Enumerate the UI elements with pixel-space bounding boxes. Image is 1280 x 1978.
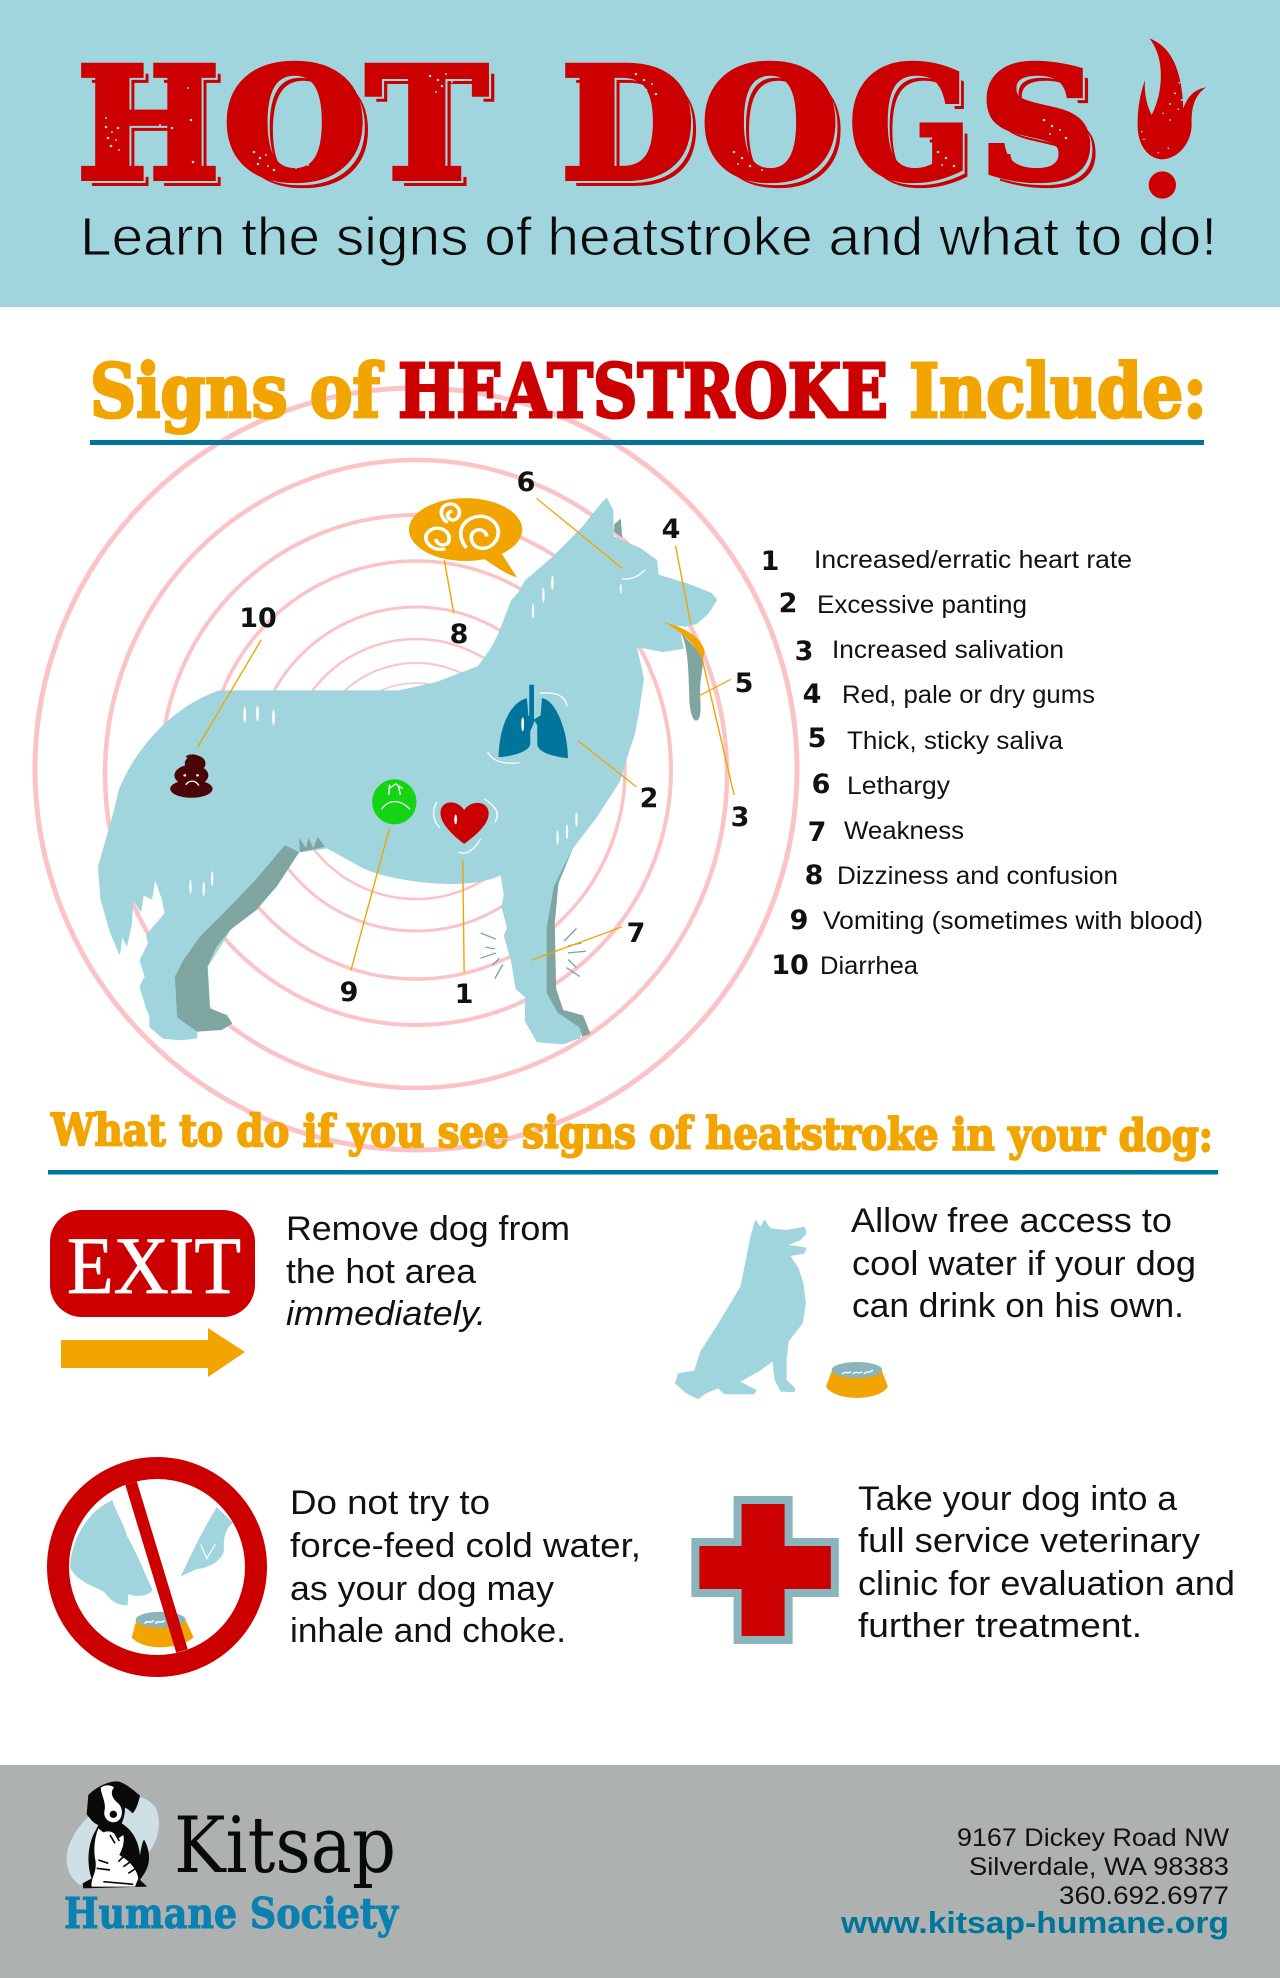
diagram numbers: 9 — [340, 977, 358, 1008]
icon: nausea face — [372, 779, 416, 824]
step text: cool water if your dog — [852, 1245, 1196, 1283]
list of signs: Thick, sticky saliva — [847, 727, 1063, 755]
heading: signs of heatstroke — [90, 349, 1207, 435]
belly tuft — [299, 837, 325, 852]
step text — [851, 1202, 1196, 1325]
title: G — [848, 34, 971, 215]
step: no force-feeding — [58, 1468, 641, 1666]
step text: can drink on his own. — [852, 1287, 1184, 1325]
dog body — [98, 498, 717, 1044]
step text — [858, 1480, 1235, 1645]
front leg shadow — [547, 848, 591, 1037]
diagram numbers: 7 — [627, 918, 645, 949]
list of signs: Weakness — [844, 817, 964, 845]
icon: heart — [434, 799, 497, 853]
icon: diarrhea — [170, 754, 213, 798]
diagram numbers: 2 — [640, 783, 658, 814]
list of signs: Lethargy — [847, 772, 951, 800]
weakness ticks — [481, 928, 586, 979]
icon: medical cross — [695, 1500, 835, 1640]
icon: flame exclamation mark — [1138, 38, 1206, 199]
step text: the hot area — [286, 1253, 476, 1291]
saliva — [680, 632, 703, 721]
step text: force-feed cold water, — [290, 1527, 641, 1565]
diagram numbers: 8 — [450, 619, 468, 650]
step text: Allow free access to — [851, 1202, 1172, 1240]
tongue — [663, 622, 705, 660]
icon: lungs — [488, 685, 568, 763]
title — [76, 34, 1096, 215]
step text: clinic for evaluation and — [858, 1565, 1235, 1603]
list of signs: 8 — [805, 860, 823, 891]
arrow — [61, 1328, 245, 1377]
icon: dog and cat logo — [67, 1781, 159, 1888]
fur highlights — [189, 575, 622, 896]
list of signs: Increased/erratic heart rate — [814, 546, 1132, 574]
step text — [290, 1484, 641, 1650]
step text: Do not try to — [290, 1484, 490, 1522]
callout lines — [198, 498, 734, 972]
step text: immediately. — [286, 1295, 486, 1333]
contact details: Silverdale, WA 98383 — [969, 1853, 1229, 1881]
title: O — [701, 34, 839, 215]
logo — [64, 1781, 399, 1938]
panel: footer — [0, 1765, 1280, 1978]
list of signs: 6 — [812, 769, 830, 800]
diagram numbers: 5 — [735, 668, 753, 699]
list of signs: Diarrhea — [820, 952, 918, 980]
icon: exit sign: EXIT — [67, 1220, 241, 1311]
contact details — [840, 1824, 1229, 1940]
heading: signs of heatstroke: Include: — [909, 349, 1207, 435]
title: H — [76, 34, 219, 215]
list of signs: 10 — [771, 950, 809, 981]
step text: inhale and choke. — [290, 1612, 566, 1650]
step: vet — [695, 1480, 1235, 1645]
list of signs: Excessive panting — [817, 591, 1027, 619]
diagram numbers: 1 — [455, 979, 473, 1010]
dog far ear — [614, 519, 622, 538]
step: exit — [50, 1210, 570, 1377]
title: T — [366, 34, 487, 215]
icon: water bowl — [826, 1362, 888, 1398]
icon: prohibition sign — [58, 1468, 256, 1666]
diagram numbers — [239, 467, 753, 1010]
closed eye — [622, 570, 645, 579]
diagram numbers: 3 — [731, 802, 749, 833]
step text — [286, 1210, 570, 1333]
heading: signs of heatstroke: HEATSTROKE — [398, 349, 888, 435]
diagram numbers: 10 — [239, 603, 277, 634]
icon: speech bubble dizziness — [409, 498, 522, 577]
title speckles — [104, 72, 1068, 172]
list of signs: 1 — [761, 546, 779, 577]
list of signs: 3 — [795, 636, 813, 667]
step text: further treatment. — [858, 1607, 1142, 1645]
step text: Take your dog into a — [858, 1480, 1177, 1518]
diagram numbers: 6 — [517, 467, 535, 498]
step: water — [675, 1202, 1196, 1399]
step text: Remove dog from — [286, 1210, 570, 1248]
list of signs: 9 — [790, 905, 808, 936]
contact details: www.kitsap-humane.org — [840, 1905, 1229, 1940]
title: O — [222, 34, 366, 215]
title: S — [978, 34, 1096, 215]
list of signs: 5 — [808, 723, 826, 754]
logo wordmark: Kitsap — [174, 1801, 396, 1891]
icon: sitting dog — [675, 1219, 807, 1399]
list of signs: Vomiting (sometimes with blood) — [823, 907, 1203, 935]
contact details: 9167 Dickey Road NW — [957, 1824, 1229, 1852]
step text: full service veterinary — [858, 1522, 1200, 1560]
dog diagram — [98, 498, 734, 1044]
list of signs: Dizziness and confusion — [837, 862, 1118, 890]
panel: header band — [0, 0, 1280, 307]
rear leg shadow — [175, 845, 299, 1032]
target rings — [35, 388, 797, 1150]
list of signs: 7 — [808, 817, 826, 848]
diagram numbers: 4 — [662, 514, 680, 545]
list of signs: Increased salivation — [832, 636, 1064, 664]
list of signs — [761, 546, 1203, 981]
contact details: 360.692.6977 — [1059, 1882, 1229, 1910]
title: D — [561, 34, 695, 215]
subtitle: Learn the signs of heatstroke and what to do! — [80, 207, 1217, 267]
step text: as your dog may — [290, 1570, 554, 1608]
heading: signs of heatstroke: Signs of — [90, 349, 384, 435]
list of signs: Red, pale or dry gums — [842, 681, 1095, 709]
list of signs: 2 — [779, 588, 797, 619]
logo: Humane Society — [64, 1889, 399, 1938]
list of signs: 4 — [803, 679, 821, 710]
